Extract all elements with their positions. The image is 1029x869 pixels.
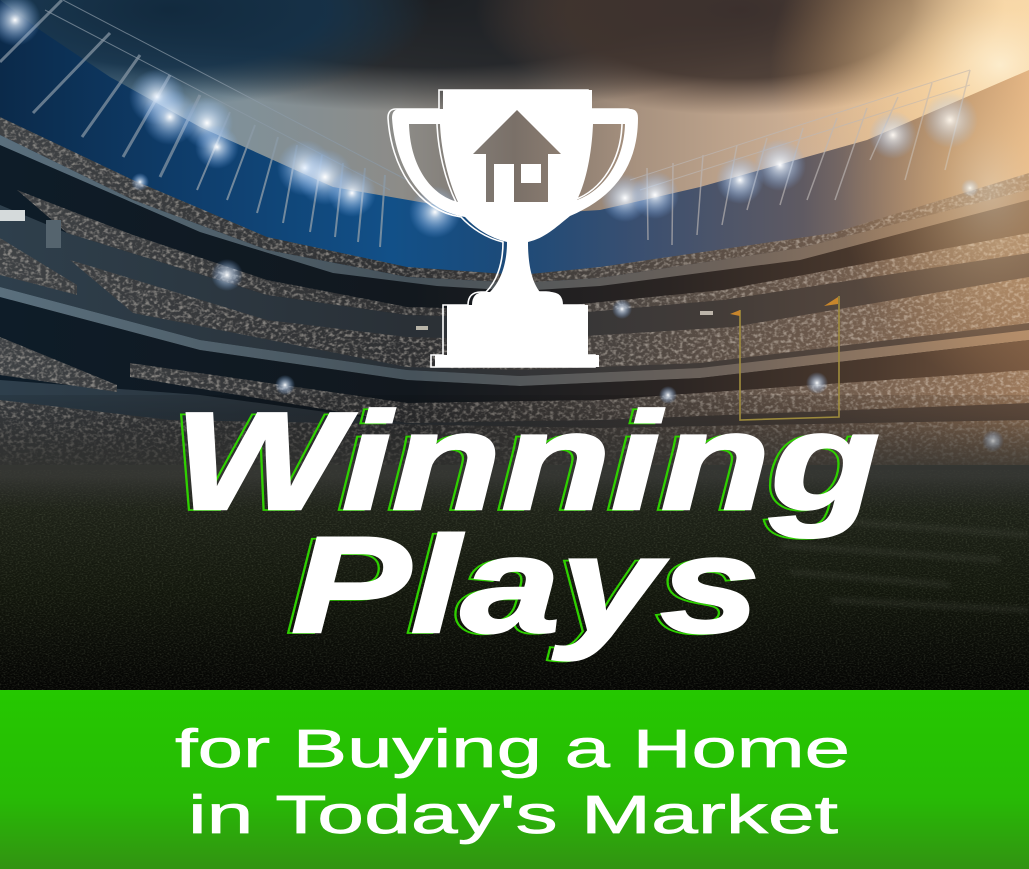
tier rails xyxy=(0,135,1029,386)
lower seating level dark xyxy=(0,297,1029,470)
trophy offset outline xyxy=(388,90,634,367)
trophy solid shape xyxy=(392,90,638,367)
yard line marks xyxy=(780,520,1029,610)
lower stands dimming xyxy=(0,395,1029,467)
green subtitle band xyxy=(0,690,1029,869)
roof structure xyxy=(0,0,1029,300)
crowd bands xyxy=(0,117,1029,465)
grass texture xyxy=(0,470,1029,690)
title outline in green: Plays xyxy=(285,510,754,663)
warm sunlight flare over stands xyxy=(840,0,1029,380)
support pylons right xyxy=(630,70,970,245)
goalpost xyxy=(730,296,839,420)
title fill in white: Plays xyxy=(291,509,760,662)
roof overhang dark xyxy=(0,135,1029,380)
title outline in green xyxy=(168,385,874,663)
title fill in white xyxy=(174,384,880,662)
support pylons left xyxy=(0,0,407,247)
trophy icon with house xyxy=(388,90,638,367)
stadium background xyxy=(0,0,1029,690)
scoreboard lights xyxy=(0,210,713,330)
stadium floodlights xyxy=(0,0,1004,452)
crowd texture xyxy=(0,100,1029,470)
title outline in green: Winning xyxy=(168,385,874,540)
fog over field edge xyxy=(0,415,1029,510)
title: Winning Plays xyxy=(168,384,880,663)
wall under second tier xyxy=(0,205,1029,376)
title fill in white: Winning xyxy=(174,384,880,539)
wall above field level xyxy=(0,380,1029,470)
football field xyxy=(0,465,1029,690)
subtitle text xyxy=(175,719,850,845)
subtitle text: for Buying a Home xyxy=(175,719,850,779)
inner handle outlines xyxy=(437,124,622,202)
subtitle text: in Today's Market xyxy=(188,785,838,845)
sky with clouds and sunset xyxy=(0,0,1029,290)
